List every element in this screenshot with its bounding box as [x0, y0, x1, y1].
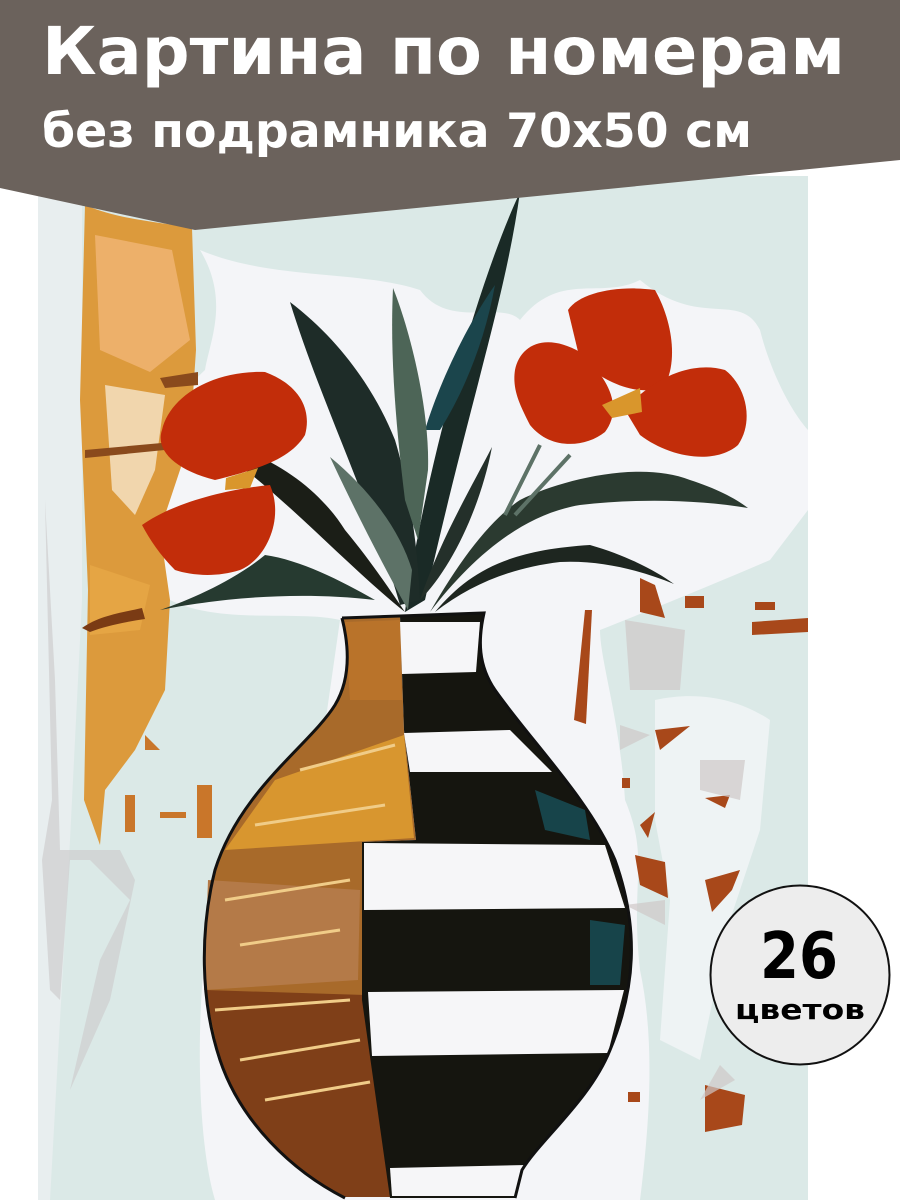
vase: white stripes — [364, 622, 625, 1196]
title: Картина по номерам — [42, 13, 845, 90]
vase: brown left half — [204, 616, 416, 1197]
badge label: цветов — [735, 993, 865, 1026]
rust splashes on right — [574, 578, 808, 1132]
flower right — [514, 288, 747, 457]
badge: 26 colours — [710, 886, 890, 1064]
painting: vase with flowers — [38, 176, 808, 1200]
vase: black striped right half — [362, 613, 631, 1198]
number of colours: 26 — [760, 920, 838, 994]
painting background — [38, 176, 808, 1200]
flower left — [142, 372, 307, 575]
ochre brush stroke — [80, 205, 196, 845]
subtitle: без подрамника 70х50 см — [42, 104, 752, 159]
stems and leaves — [160, 192, 748, 612]
header banner — [0, 0, 900, 230]
